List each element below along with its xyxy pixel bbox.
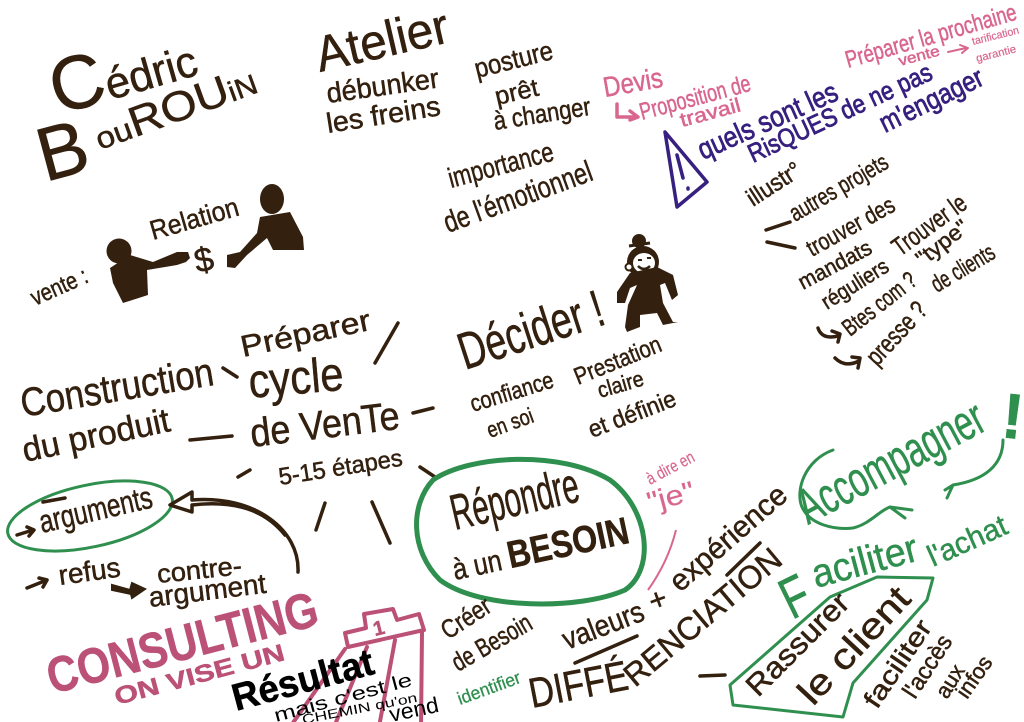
panel: consulting bbox=[41, 581, 441, 722]
arguments word: arguments bbox=[35, 479, 156, 540]
regular: réguliers bbox=[816, 253, 893, 314]
je: "je" bbox=[644, 475, 698, 518]
claire: claire bbox=[594, 366, 647, 403]
posture word: posture bbox=[471, 35, 556, 84]
panel: repondre a un besoin bbox=[417, 457, 644, 604]
argument: argument bbox=[147, 568, 268, 613]
icon: pink arrow bbox=[617, 104, 638, 120]
green oval bbox=[1, 468, 179, 564]
icon: arrow one bbox=[818, 328, 840, 342]
panel: next sale bbox=[842, 0, 1020, 74]
callout: a dire en je bbox=[643, 447, 698, 590]
panel: arguments bbox=[1, 468, 298, 613]
panel: atelier bbox=[310, 0, 454, 139]
on vise un: ON VISE UN bbox=[112, 639, 288, 711]
panel: faciliter bbox=[730, 509, 1013, 717]
counter: contre- bbox=[155, 550, 243, 589]
question line three: m'engager bbox=[874, 61, 988, 138]
pink line bbox=[648, 530, 676, 590]
facilitate access: faciliter bbox=[857, 613, 938, 713]
work: travail bbox=[678, 95, 743, 132]
last name rest: ouROUiN bbox=[87, 56, 263, 158]
thick arrow bbox=[112, 583, 145, 598]
refusal word: refus bbox=[57, 552, 122, 591]
line two: de l'émotionnel bbox=[439, 155, 597, 240]
experience: expérience bbox=[663, 478, 794, 598]
prepare: Préparer bbox=[238, 304, 374, 364]
find type: Trouver le bbox=[886, 188, 972, 262]
dash two bbox=[767, 242, 795, 248]
dash one bbox=[766, 222, 790, 230]
type: "type" bbox=[911, 214, 973, 271]
underlines bbox=[575, 543, 760, 676]
icon: monkey character bbox=[617, 234, 678, 332]
line two: du produit bbox=[19, 401, 174, 470]
icon: dollar: $ bbox=[191, 240, 217, 281]
purchase: l'achat bbox=[922, 509, 1013, 573]
panel: illustration list bbox=[742, 149, 1000, 371]
devis heading: Devis bbox=[601, 62, 665, 103]
other projects: autres projets bbox=[784, 149, 893, 227]
heading: Décider ! bbox=[451, 280, 611, 381]
panel: risks bbox=[665, 57, 988, 207]
respond: Répondre bbox=[445, 457, 584, 541]
a un besoin: à un BESOIN bbox=[448, 510, 633, 589]
panel: decider bbox=[451, 234, 680, 444]
panel: devis bbox=[601, 62, 754, 132]
icon: left arm bbox=[800, 450, 912, 528]
steps: 5-15 étapes bbox=[277, 445, 404, 491]
facilitate initial: F bbox=[769, 562, 821, 632]
icon: arrow two bbox=[835, 357, 860, 368]
creer: Créer bbox=[435, 590, 497, 645]
panel: posture bbox=[471, 35, 593, 136]
en soi: en soi bbox=[483, 403, 537, 443]
ready word: prêt bbox=[492, 74, 541, 111]
icon: left person bbox=[106, 238, 190, 303]
facilitate rest: aciliter bbox=[807, 526, 923, 597]
panel: cycle de vente centre bbox=[190, 304, 435, 543]
icon: podium: 1 bbox=[371, 617, 387, 641]
curved arrow bbox=[170, 492, 298, 572]
label: illustr° bbox=[742, 157, 807, 212]
self confidence: confiance bbox=[467, 367, 557, 418]
radial strokes bbox=[190, 323, 435, 543]
result: Résultat bbox=[227, 642, 379, 720]
plus: + bbox=[644, 582, 672, 619]
find mandates: trouver des bbox=[802, 192, 900, 262]
clients: de clients bbox=[926, 239, 1000, 298]
differentiation end: RENCIATION bbox=[616, 540, 789, 693]
line one: à dire en bbox=[643, 447, 698, 489]
consulting word: CONSULTING bbox=[41, 581, 324, 705]
line two: les freins bbox=[324, 90, 443, 139]
btes com: Btes com ? bbox=[837, 267, 922, 342]
panel: accompagner bbox=[787, 379, 1024, 535]
access: l'accès bbox=[897, 630, 958, 703]
panel: relation vente bbox=[26, 184, 304, 311]
change words: à changer bbox=[491, 91, 593, 136]
vente label: vente : bbox=[26, 262, 92, 311]
icon: podium bbox=[290, 609, 424, 722]
green frame bbox=[730, 577, 933, 717]
guarantee: garantie bbox=[975, 43, 1018, 65]
line one: débunker bbox=[325, 63, 441, 109]
differentiation start: DIFFÉ bbox=[525, 652, 632, 717]
proposal: Proposition de bbox=[637, 70, 754, 126]
dash bbox=[17, 498, 65, 536]
panel: emotion bbox=[439, 136, 597, 240]
panel: differentiation bbox=[435, 478, 794, 717]
pricing: tarification bbox=[971, 25, 1020, 48]
last name initial: B bbox=[27, 103, 98, 198]
identifier: identifier bbox=[455, 667, 523, 709]
press: presse ? bbox=[859, 295, 933, 371]
client: le client bbox=[789, 578, 918, 712]
question line two: RisQUES de ne pas bbox=[743, 57, 937, 168]
mandates: mandats bbox=[794, 235, 876, 294]
icon: right person bbox=[227, 184, 304, 268]
prestation: Prestation bbox=[570, 331, 666, 391]
panel: construction du produit bbox=[17, 350, 217, 470]
refusal arrow bbox=[27, 578, 47, 588]
icon: small arrow bbox=[948, 45, 968, 53]
de besoin: de Besoin bbox=[446, 607, 537, 677]
icon: warning triangle bbox=[665, 132, 707, 207]
cycle: cycle bbox=[246, 348, 346, 409]
infos: infos bbox=[951, 651, 997, 703]
icon: right arm bbox=[945, 440, 1003, 498]
question line one: quels sont les bbox=[693, 76, 843, 166]
line one: importance bbox=[445, 136, 557, 194]
values: valeurs bbox=[558, 595, 649, 657]
green oval bbox=[417, 459, 644, 604]
relation label: Relation bbox=[146, 192, 242, 246]
line one: Construction bbox=[17, 350, 217, 426]
aux: aux bbox=[930, 660, 970, 703]
de vente: de VenTe bbox=[248, 394, 402, 456]
title: speaker name bbox=[27, 9, 263, 198]
reassure: Rassurer bbox=[740, 586, 856, 703]
first name: Cédric bbox=[39, 9, 205, 131]
definie: et définie bbox=[584, 385, 680, 444]
sale word: vente bbox=[897, 43, 942, 70]
